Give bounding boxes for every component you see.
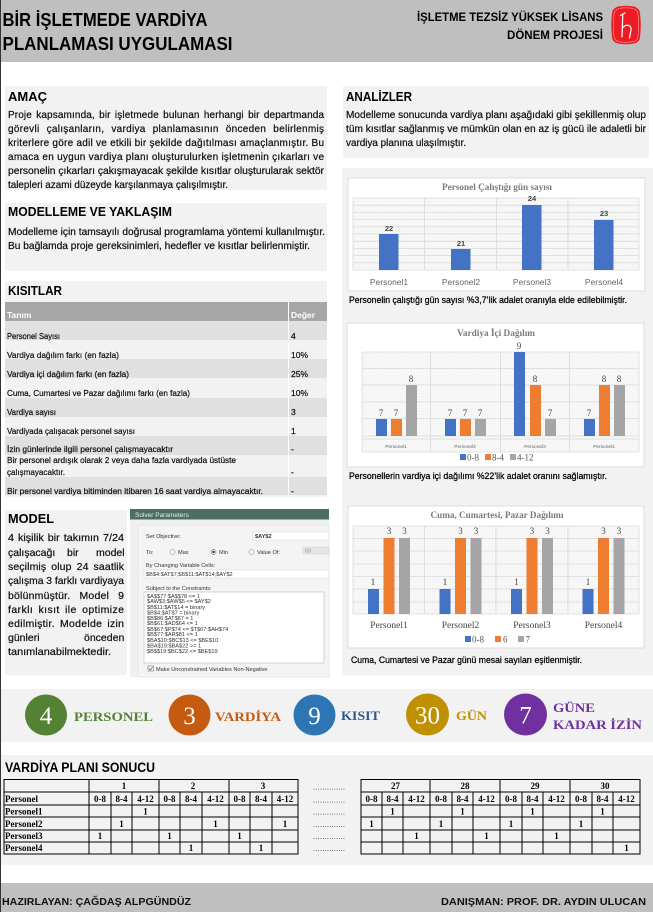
stat: 4 personel: PERSONEL	[74, 709, 153, 724]
schedule table: days 27-30: 0-8	[505, 794, 517, 804]
chart: vardiya içi dağılım: 7	[379, 408, 384, 418]
solver parameters screenshot: $B$$19:$BC$22 <= $BE$19	[147, 649, 218, 655]
schedule table: days 27-30: 29	[530, 781, 540, 791]
legend: chart 3	[465, 634, 530, 644]
schedule table: days 27-30: 8-4	[456, 794, 469, 804]
solver parameters screenshot: $BA$19:$BA$22 >= 1	[147, 644, 201, 650]
solver parameters screenshot: 60	[305, 548, 311, 554]
schedule table: days 27-30: 1	[390, 806, 395, 816]
ellipsis dots: ..............	[313, 822, 345, 829]
chart: vardiya içi dağılım: Personel4	[593, 444, 615, 450]
schedule table: days 1-3: 1	[237, 831, 242, 841]
schedule table: days 1-3: 1	[98, 831, 103, 841]
legend: chart 3: 6	[503, 634, 508, 644]
solver parameters screenshot: $B$4:$AT$7;$B$11:$AT$14;$AY$2	[146, 572, 233, 578]
schedule table: days 27-30: 1	[600, 806, 605, 816]
panel: vardiya planı sonucu	[1, 755, 653, 865]
chart: cuma, cumartesi, pazar dağılımı: Personel2	[442, 621, 479, 631]
chart: cuma, cumartesi, pazar dağılımı: Cuma, Cumartesi, Pazar Dağılımı	[430, 511, 564, 521]
schedule table: days 27-30: 28	[460, 781, 470, 791]
ellipsis dots	[313, 784, 345, 853]
text block: analizler: vardiya planına ulaşılmıştır.	[346, 138, 466, 149]
schedule table: days 27-30: 27	[391, 781, 400, 791]
chart: cuma, cumartesi, pazar dağılımı: 1	[586, 577, 590, 587]
schedule table: days 1-3: 8-4	[185, 794, 197, 804]
chart: vardiya içi dağılım: 8	[602, 374, 607, 384]
constraints table: Cuma, Cumartesi ve Pazar dağılımı farkı (en fazla)	[7, 388, 190, 398]
schedule table: days 27-30: 1	[439, 819, 444, 829]
footer band	[1, 883, 653, 912]
stat: 30 gün	[406, 694, 488, 736]
text block: model: 4 kişilik bir takımın 7/24	[8, 532, 124, 544]
stat: 30 gün: GÜN	[456, 708, 488, 723]
constraints table: Bir personel vardiya bitiminden itibaren 16 saat vardiya almayacaktır.	[7, 486, 263, 496]
solver parameters screenshot: Solver Parameters	[135, 512, 190, 519]
legend: chart 2: 8-4	[492, 452, 504, 462]
advisor: DANIŞMAN: PROF. DR. AYDIN ULUCAN	[441, 896, 646, 908]
schedule table: days 1-3: 0-8	[234, 794, 246, 804]
legend: chart 3: 0-8	[472, 634, 484, 644]
stat: 4 personel	[25, 694, 153, 736]
stat: 7 güne kadar izin: 7	[519, 702, 532, 730]
chart: cuma, cumartesi, pazar dağılımı: 3	[458, 526, 463, 536]
schedule table: days 1-3: 0-8	[164, 794, 176, 804]
panel: charts background	[342, 168, 653, 675]
schedule table: days 27-30: 1	[369, 819, 374, 829]
solver parameters screenshot: $B$77:$AR$81 <= 1	[147, 632, 198, 638]
panel: analizler	[343, 86, 649, 158]
chart: cuma, cumartesi, pazar dağılımı: Personel1	[370, 621, 408, 631]
chart: cuma, cumartesi, pazar dağılımı	[348, 506, 644, 648]
schedule table: days 1-3: 1	[213, 819, 218, 829]
stat: 3 vardiya: VARDİYA	[215, 709, 282, 724]
schedule table: days 27-30: 8-4	[526, 794, 539, 804]
text block: model: bir	[67, 547, 79, 559]
solver parameters screenshot	[130, 509, 329, 677]
constraints table: Vardiya sayısı	[7, 407, 56, 417]
legend: chart 2	[460, 452, 534, 462]
solver parameters screenshot: Subject to the Constraints:	[146, 586, 212, 592]
solver parameters screenshot: By Changing Variable Cells:	[146, 563, 216, 569]
schedule table: days 27-30: 0-8	[435, 794, 447, 804]
heading: model: MODEL	[8, 511, 54, 526]
text block: model: model	[96, 547, 125, 559]
panel: modelleme ve yaklaşım	[5, 203, 327, 271]
text block: model: günleri	[8, 632, 40, 644]
solver parameters screenshot: $AY$2	[255, 534, 272, 540]
chart: vardiya içi dağılım: 8	[617, 374, 622, 384]
text block: model: bölünmüştür. Model 9	[8, 590, 124, 602]
chart: vardiya içi dağılım: 7	[463, 408, 468, 418]
text block: model	[8, 532, 125, 658]
solver parameters screenshot: $AW$3:$AW$5 <= $AY$2	[147, 599, 211, 605]
header band	[1, 0, 653, 62]
ellipsis dots: ..............	[313, 846, 345, 853]
stat: 7 güne kadar izin: KADAR İZİN	[553, 717, 643, 732]
solver parameters screenshot: $B$61:$AD$64 <= 1	[147, 621, 198, 627]
constraints table: -	[291, 486, 294, 496]
schedule table: days 1-3: 1	[189, 843, 194, 853]
solver parameters screenshot: Max	[178, 550, 189, 556]
schedule table: days 27-30: 8-4	[596, 794, 609, 804]
schedule table: days 27-30: 1	[460, 806, 465, 816]
constraints table: 10%	[291, 350, 308, 360]
key figures band	[1, 689, 653, 742]
heading: vardiya planı sonucu: VARDİYA PLANI SONUCU	[5, 760, 155, 775]
solver parameters screenshot: $A$$77:$A$$78 <= 1	[147, 594, 200, 600]
ellipsis dots: ..............	[313, 784, 345, 792]
text block: amaç: görevli çalışanların, vardiya planlamasının önceden belirlenmiş	[8, 124, 324, 135]
schedule table: days 27-30: 30	[600, 781, 610, 791]
heading: modelleme: MODELLEME VE YAKLAŞIM	[8, 204, 172, 219]
solver parameters screenshot: Make Unconstrained Variables Non-Negative	[156, 667, 268, 673]
chart: vardiya içi dağılım: 8	[533, 374, 538, 384]
schedule table: days 1-3: 1	[119, 819, 124, 829]
text block: amaç: personelin çıkarları çakışmayacak şekilde kısıtlar oluşturularak sektör	[8, 166, 325, 177]
stat: 30 gün: 30	[415, 702, 440, 730]
panel: kısıtlar	[5, 281, 327, 497]
heading: kısıtlar: KISITLAR	[8, 283, 63, 298]
constraints table: -	[291, 467, 294, 477]
text block: amaç	[8, 110, 325, 191]
chart: vardiya içi dağılım: 9	[517, 341, 522, 351]
chart: cuma, cumartesi, pazar dağılımı: 3	[530, 526, 535, 536]
chart: personel çalıştığı gün sayısı: Personel2	[442, 277, 480, 287]
ellipsis dots: ..............	[313, 798, 345, 804]
constraints table: Vardiya içi dağılım farkı (en fazla)	[7, 369, 129, 379]
constraints table: 25%	[291, 369, 308, 379]
text block: amaç: Proje kapsamında, bir işletmede bulunan herhangi bir departmanda	[8, 110, 324, 121]
title	[2, 10, 232, 54]
schedule table: days 27-30: 0-8	[575, 794, 587, 804]
chart: cuma, cumartesi, pazar dağılımı: 1	[514, 577, 519, 587]
constraints table: 3	[291, 407, 296, 417]
schedule table: days 27-30: 1	[484, 831, 489, 841]
ellipsis dots: ..............	[313, 834, 345, 841]
schedule table: days 1-3	[4, 779, 298, 854]
text block: modelleme: Bu bağlamda proje gereksinimleri, hedefler ve kısıtlar belirlenmiştir.	[8, 241, 310, 252]
chart: vardiya içi dağılım: Vardiya İçi Dağılım	[457, 327, 535, 339]
stat: 3 vardiya	[168, 694, 282, 736]
text block: analizler	[346, 110, 647, 149]
schedule table: days 1-3: 3	[261, 781, 266, 791]
text block: model: seçilmiş olup 24 saatlik	[8, 561, 125, 573]
legend: chart 2: 0-8	[467, 452, 479, 462]
schedule table: days 27-30: 1	[530, 806, 535, 816]
text block: modelleme: Modelleme için tamsayılı doğrusal programlama yöntemi kullanılmıştır.	[8, 227, 325, 238]
stat: 4 personel: 4	[40, 703, 53, 730]
schedule table: days 1-3: 8-4	[255, 794, 267, 804]
project type: İŞLETME TEZSİZ YÜKSEK LİSANS	[417, 9, 603, 24]
stat: 9 kısıt: KISIT	[341, 708, 380, 723]
chart: personel çalıştığı gün sayısı	[348, 178, 645, 291]
schedule table: days 27-30: 1	[414, 831, 419, 841]
panel: amaç	[5, 86, 327, 191]
chart: vardiya içi dağılım: 7	[548, 408, 553, 418]
solver parameters screenshot: $B$67:$P$74 <= $T$67:$AH$74	[147, 627, 228, 633]
schedule table: days 1-3: 4-12	[207, 794, 224, 804]
chart: cuma, cumartesi, pazar dağılımı: 3	[474, 526, 479, 536]
schedule table: days 27-30: 4-12	[618, 794, 635, 804]
stat: 7 güne kadar izin	[504, 694, 643, 736]
schedule table: days 1-3: Personel1	[5, 806, 43, 816]
text block: amaç: amaca en uygun vardiya planı oluşturulurken işletmenin çıkarları ve	[8, 152, 324, 163]
constraints table: Vardiyada çalışacak personel sayısı	[7, 426, 135, 436]
schedule table: days 27-30: 4-12	[478, 794, 495, 804]
text block: amaç: talepleri azami düzeyde karşılanmaya çalışılmıştır.	[8, 180, 228, 191]
schedule table: days 27-30: 4-12	[548, 794, 565, 804]
constraints table: İzin günlerinde ilgili personel çalışmayacaktır	[7, 444, 173, 454]
stat: 3 vardiya: 3	[183, 703, 196, 730]
chart: cuma, cumartesi, pazar dağılımı: 3	[387, 526, 392, 536]
schedule table: days 1-3: Personel2	[5, 819, 43, 829]
chart: cuma, cumartesi, pazar dağılımı: 1	[443, 577, 447, 587]
chart: vardiya içi dağılım: 7	[394, 408, 399, 418]
chart: vardiya içi dağılım	[347, 323, 644, 467]
schedule table: days 1-3: Personel3	[5, 831, 43, 841]
chart: personel çalıştığı gün sayısı: Personel Çalıştığı gün sayısı	[442, 183, 552, 193]
schedule table: days 27-30: 1	[579, 819, 584, 829]
text block: model: farklı kısıt ile optimize	[8, 604, 124, 616]
solver parameters screenshot: $BA$10:$BC$13 <= $BE$10	[147, 638, 218, 644]
caption: chart 1: Personelin çalıştığı gün sayısı %3,7’lik adalet oranıyla elde edilebilmiştir.	[349, 295, 627, 305]
text block: analizler: Modelleme sonucunda vardiya planı aşağıdaki gibi şekillenmiş olup	[346, 110, 646, 121]
schedule table: days 27-30: 8-4	[386, 794, 399, 804]
ellipsis dots: ..............	[313, 810, 345, 816]
caption: chart 3: Cuma, Cumartesi ve Pazar günü mesai sayıları eşitlenmiştir.	[351, 655, 582, 665]
chart: vardiya içi dağılım: 8	[409, 374, 414, 384]
stat: 9 kısıt	[294, 694, 380, 736]
project type	[417, 9, 603, 42]
constraints table: 1	[291, 426, 296, 436]
chart: cuma, cumartesi, pazar dağılımı: Personel4	[585, 621, 622, 631]
caption: chart 2: Personellerin vardiya içi dağılımı %22’lik adalet oranını sağlamıştır.	[349, 471, 607, 481]
title: PLANLAMASI UYGULAMASI	[2, 34, 232, 54]
stat: 7 güne kadar izin: GÜNE	[553, 700, 595, 715]
schedule table: days 27-30: 1	[624, 843, 629, 853]
chart: cuma, cumartesi, pazar dağılımı: 3	[545, 526, 550, 536]
schedule table: days 1-3: 8-4	[116, 794, 128, 804]
panel: model	[5, 510, 127, 675]
constraints table: Tanım	[7, 310, 32, 320]
chart: cuma, cumartesi, pazar dağılımı: 3	[402, 526, 407, 536]
text block: model: edilmiştir. Modelde izin	[8, 618, 124, 630]
solver parameters screenshot: Value Of:	[257, 550, 280, 556]
solver parameters screenshot: Set Objective:	[146, 534, 181, 540]
title: BİR İŞLETMEDE VARDİYA	[2, 10, 208, 30]
chart: vardiya içi dağılım: 7	[478, 408, 483, 418]
schedule table: days 27-30: 1	[509, 819, 514, 829]
schedule table: days 27-30: 0-8	[366, 794, 378, 804]
schedule table: days 1-3: 2	[191, 781, 196, 791]
chart: vardiya içi dağılım: Personel3	[524, 444, 546, 450]
schedule table: days 1-3: 1	[122, 781, 127, 791]
schedule table: days 1-3: 1	[259, 843, 264, 853]
project type: DÖNEM PROJESİ	[507, 27, 603, 42]
chart: personel çalıştığı gün sayısı: Personel4	[585, 277, 623, 287]
chart: personel çalıştığı gün sayısı: Personel3	[513, 277, 551, 287]
constraints table: 4	[291, 331, 296, 341]
chart: cuma, cumartesi, pazar dağılımı: 1	[371, 577, 375, 587]
solver parameters screenshot: $B$11:$AT$14 = binary	[147, 605, 205, 611]
constraints table	[5, 302, 327, 496]
schedule table: days 1-3: 1	[283, 819, 288, 829]
constraints table: -	[291, 444, 294, 454]
constraints table: 10%	[291, 388, 308, 398]
text block: model: çalışacağı	[8, 547, 55, 559]
schedule table: days 1-3: 0-8	[94, 794, 106, 804]
schedule table: days 1-3: 1	[143, 806, 148, 816]
constraints table: Personel Sayısı	[7, 331, 60, 341]
icon: university logo	[611, 6, 641, 44]
chart: personel çalıştığı gün sayısı: 23	[600, 209, 608, 218]
chart: vardiya içi dağılım: 7	[587, 408, 592, 418]
solver parameters screenshot: Min	[219, 550, 228, 556]
chart: cuma, cumartesi, pazar dağılımı: Personel3	[513, 621, 551, 631]
schedule table: days 1-3: 4-12	[277, 794, 294, 804]
schedule table: days 1-3: 4-12	[137, 794, 154, 804]
schedule table: days 1-3: Personel	[5, 794, 38, 804]
text block: model: önceden	[84, 632, 124, 644]
chart: cuma, cumartesi, pazar dağılımı: 3	[617, 526, 622, 536]
constraints table: Vardiya dağılım farkı (en fazla)	[7, 350, 119, 360]
schedule table: days 1-3: Personel4	[5, 843, 43, 853]
chart: cuma, cumartesi, pazar dağılımı: 3	[601, 526, 606, 536]
author: HAZIRLAYAN: ÇAĞDAŞ ALPGÜNDÜZ	[2, 895, 192, 908]
chart: vardiya içi dağılım: Personel1	[385, 444, 407, 450]
legend: chart 2: 4-12	[517, 452, 534, 462]
chart: personel çalıştığı gün sayısı: 24	[528, 194, 537, 203]
solver parameters screenshot: $B$86:$AT$87 = 1	[147, 616, 193, 622]
heading: amaç: AMAÇ	[8, 89, 48, 104]
schedule table: days 27-30: 4-12	[408, 794, 425, 804]
text block: model: tanımlanabilmektedir.	[8, 646, 111, 658]
constraints table: Değer	[291, 310, 316, 320]
heading: analizler: ANALİZLER	[346, 89, 413, 104]
schedule table: days 27-30: 1	[554, 831, 559, 841]
schedule table: days 27-30	[361, 779, 640, 854]
text block: model: çalışma 3 farklı vardiyaya	[8, 575, 124, 587]
chart: personel çalıştığı gün sayısı: Personel1	[370, 277, 408, 287]
solver parameters screenshot: $B$4:$AT$7 = binary	[147, 610, 199, 616]
constraints table: çalışmayacaktır.	[7, 467, 65, 477]
chart: personel çalıştığı gün sayısı: 21	[457, 239, 465, 248]
stat: 9 kısıt: 9	[308, 703, 321, 730]
legend: chart 3: 7	[526, 634, 530, 644]
schedule table: days 1-3: 1	[167, 831, 172, 841]
solver parameters screenshot: To:	[146, 550, 154, 556]
text block: analizler: tüm kısıtlar sağlanmış ve mümkün olan en az iş gücü ile adaletli bir	[346, 124, 647, 135]
constraints table: Bir personel ardışık olarak 2 veya daha fazla vardiyada üstüste	[7, 455, 236, 465]
text block: modelleme	[8, 227, 325, 252]
chart: personel çalıştığı gün sayısı: 22	[385, 224, 393, 233]
chart: vardiya içi dağılım: 7	[448, 408, 453, 418]
text block: amaç: kriterlere göre adil ve etkili bir şekilde dağıtılması amaçlanmıştır. Bu	[8, 138, 324, 149]
chart: vardiya içi dağılım: Personel2	[454, 444, 476, 450]
